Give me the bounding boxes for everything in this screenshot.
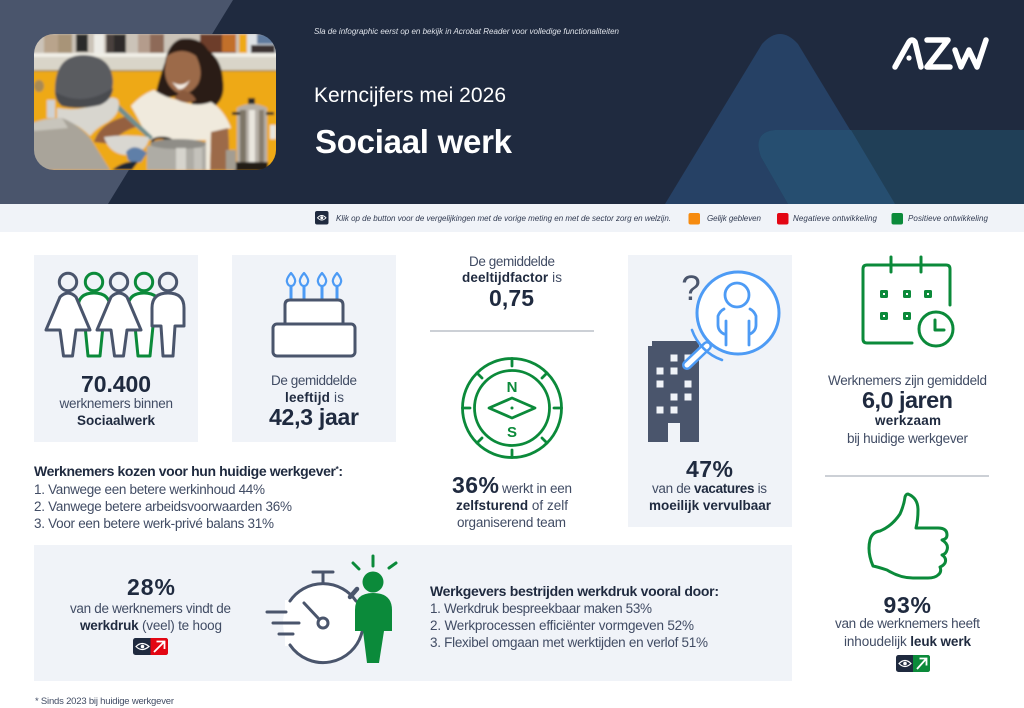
werkdruk measures list: 3. Flexibel omgaan met werktijden en verlof 51% xyxy=(430,635,708,650)
werkgever keuze list: 2. Vanwege betere arbeidsvoorwaarden 36% xyxy=(34,499,292,514)
stat: zelfsturend: werkt in een xyxy=(501,481,572,496)
icon: stopwatch with person xyxy=(267,556,396,663)
werkgever keuze list xyxy=(34,463,343,531)
legend: red xyxy=(777,213,878,224)
legend: green: Positieve ontwikkeling xyxy=(908,214,989,223)
woman left arm xyxy=(94,116,140,144)
text: van de werknemers vindt de xyxy=(70,601,231,616)
icon: compass: N xyxy=(507,379,517,396)
stat: deeltijdfactor: deeltijdfactor is xyxy=(462,270,562,285)
text: werkdruk (veel) te hoog xyxy=(79,618,222,633)
werkdruk measures list: Werkgevers bestrijden werkdruk vooral door: xyxy=(430,583,719,599)
stat: 42,3 jaar: 42,3 jaar xyxy=(269,404,359,430)
urn xyxy=(237,104,267,163)
ladle xyxy=(114,103,153,140)
stat: 93% xyxy=(835,592,980,672)
woman face xyxy=(165,51,201,94)
icon: compass: S xyxy=(507,424,517,441)
stat: deeltijdfactor: De gemiddelde xyxy=(469,254,555,269)
bowl xyxy=(104,136,149,155)
icon: question mark: ? xyxy=(681,269,701,308)
stat: jaren werkzaam: 6,0 jaren xyxy=(862,387,953,413)
stat: 93%: inhoudelijk leuk werk xyxy=(844,634,971,649)
elder jacket xyxy=(30,118,110,170)
panel: werknemers xyxy=(34,255,198,442)
label bold: Sociaalwerk xyxy=(77,413,155,428)
woman hair xyxy=(156,38,224,110)
legend: green xyxy=(892,213,989,224)
icon: magnifier with person xyxy=(687,272,779,365)
stat: zelfsturend xyxy=(452,472,572,530)
icon: birthday cake xyxy=(273,273,355,356)
icon: eye button xyxy=(315,211,328,224)
text bold: moeilijk vervulbaar xyxy=(649,498,772,513)
subtitle: Kerncijfers mei 2026 xyxy=(314,84,506,107)
stat: 28%: 28% xyxy=(127,574,175,600)
header photo: soup kitchen volunteer xyxy=(30,30,280,175)
woman shirt xyxy=(131,90,231,170)
icon: thumbs up xyxy=(869,494,947,578)
text: leeftijd is xyxy=(285,390,344,405)
button: red comparison xyxy=(133,638,168,655)
werkgever keuze list: Werknemers kozen voor hun huidige werkgever xyxy=(34,463,336,479)
werkgever keuze list: : xyxy=(338,463,343,479)
werkgever keuze list: 1. Vanwege een betere werkinhoud 44% xyxy=(34,482,265,497)
footnote: * Sinds 2023 bij huidige werkgever xyxy=(35,696,174,707)
woman right arm xyxy=(210,128,229,170)
panel: werkdruk xyxy=(34,545,792,681)
title: Sociaal werk xyxy=(315,123,513,160)
werkgever keuze list: * xyxy=(336,465,340,474)
legend instruction: Klik op de button voor de vergelijkingen met de vorige meting en met de sector zorg en welzijn. xyxy=(336,214,671,223)
label: werknemers binnen xyxy=(58,396,173,411)
panel: vacatures xyxy=(628,255,792,527)
stat: 70.400: 70.400 xyxy=(81,371,151,397)
text: De gemiddelde xyxy=(271,373,357,388)
icon: compass xyxy=(462,358,562,458)
logo AZW xyxy=(895,40,986,67)
stat: deeltijdfactor xyxy=(462,254,562,311)
werkdruk measures list: 1. Werkdruk bespreekbaar maken 53% xyxy=(430,601,652,616)
legend: orange xyxy=(688,213,762,224)
stat: zelfsturend: organiserend team xyxy=(457,515,566,530)
panel: leeftijd xyxy=(232,255,396,442)
werkdruk measures list: 2. Werkprocessen efficiënter vormgeven 52% xyxy=(430,618,694,633)
legend: orange: Gelijk gebleven xyxy=(707,214,762,223)
icon: group of people xyxy=(46,273,184,356)
top note: Sla de infographic eerst op en bekijk in Acrobat Reader voor volledige functionaliteiten xyxy=(314,27,620,36)
werkgever keuze list: 3. Voor een betere werk-privé balans 31% xyxy=(34,516,274,531)
button: green comparison xyxy=(896,655,930,672)
stat: 93%: van de werknemers heeft xyxy=(835,616,980,631)
beanie xyxy=(55,55,113,108)
stat: jaren werkzaam xyxy=(828,373,987,446)
werkdruk measures list xyxy=(430,583,719,650)
text: van de vacatures is xyxy=(652,481,767,496)
glove xyxy=(126,147,147,163)
header banner xyxy=(0,0,1024,204)
stat: jaren werkzaam: werkzaam xyxy=(874,413,941,428)
elder hair xyxy=(57,98,119,136)
legend: red: Negatieve ontwikkeling xyxy=(793,214,878,223)
icon: calendar with clock xyxy=(863,257,953,346)
stat: zelfsturend: 36% xyxy=(452,472,499,498)
stat: jaren werkzaam: bij huidige werkgever xyxy=(847,431,968,446)
pot xyxy=(147,142,206,170)
stat: 93%: 93% xyxy=(884,592,931,618)
stat: deeltijdfactor: 0,75 xyxy=(489,285,534,311)
legend bar xyxy=(0,204,1024,232)
stat: 47%: 47% xyxy=(686,456,733,482)
stat: zelfsturend: zelfsturend of zelf xyxy=(456,498,568,513)
stat: jaren werkzaam: Werknemers zijn gemiddeld xyxy=(828,373,987,388)
icon: building xyxy=(648,341,699,442)
